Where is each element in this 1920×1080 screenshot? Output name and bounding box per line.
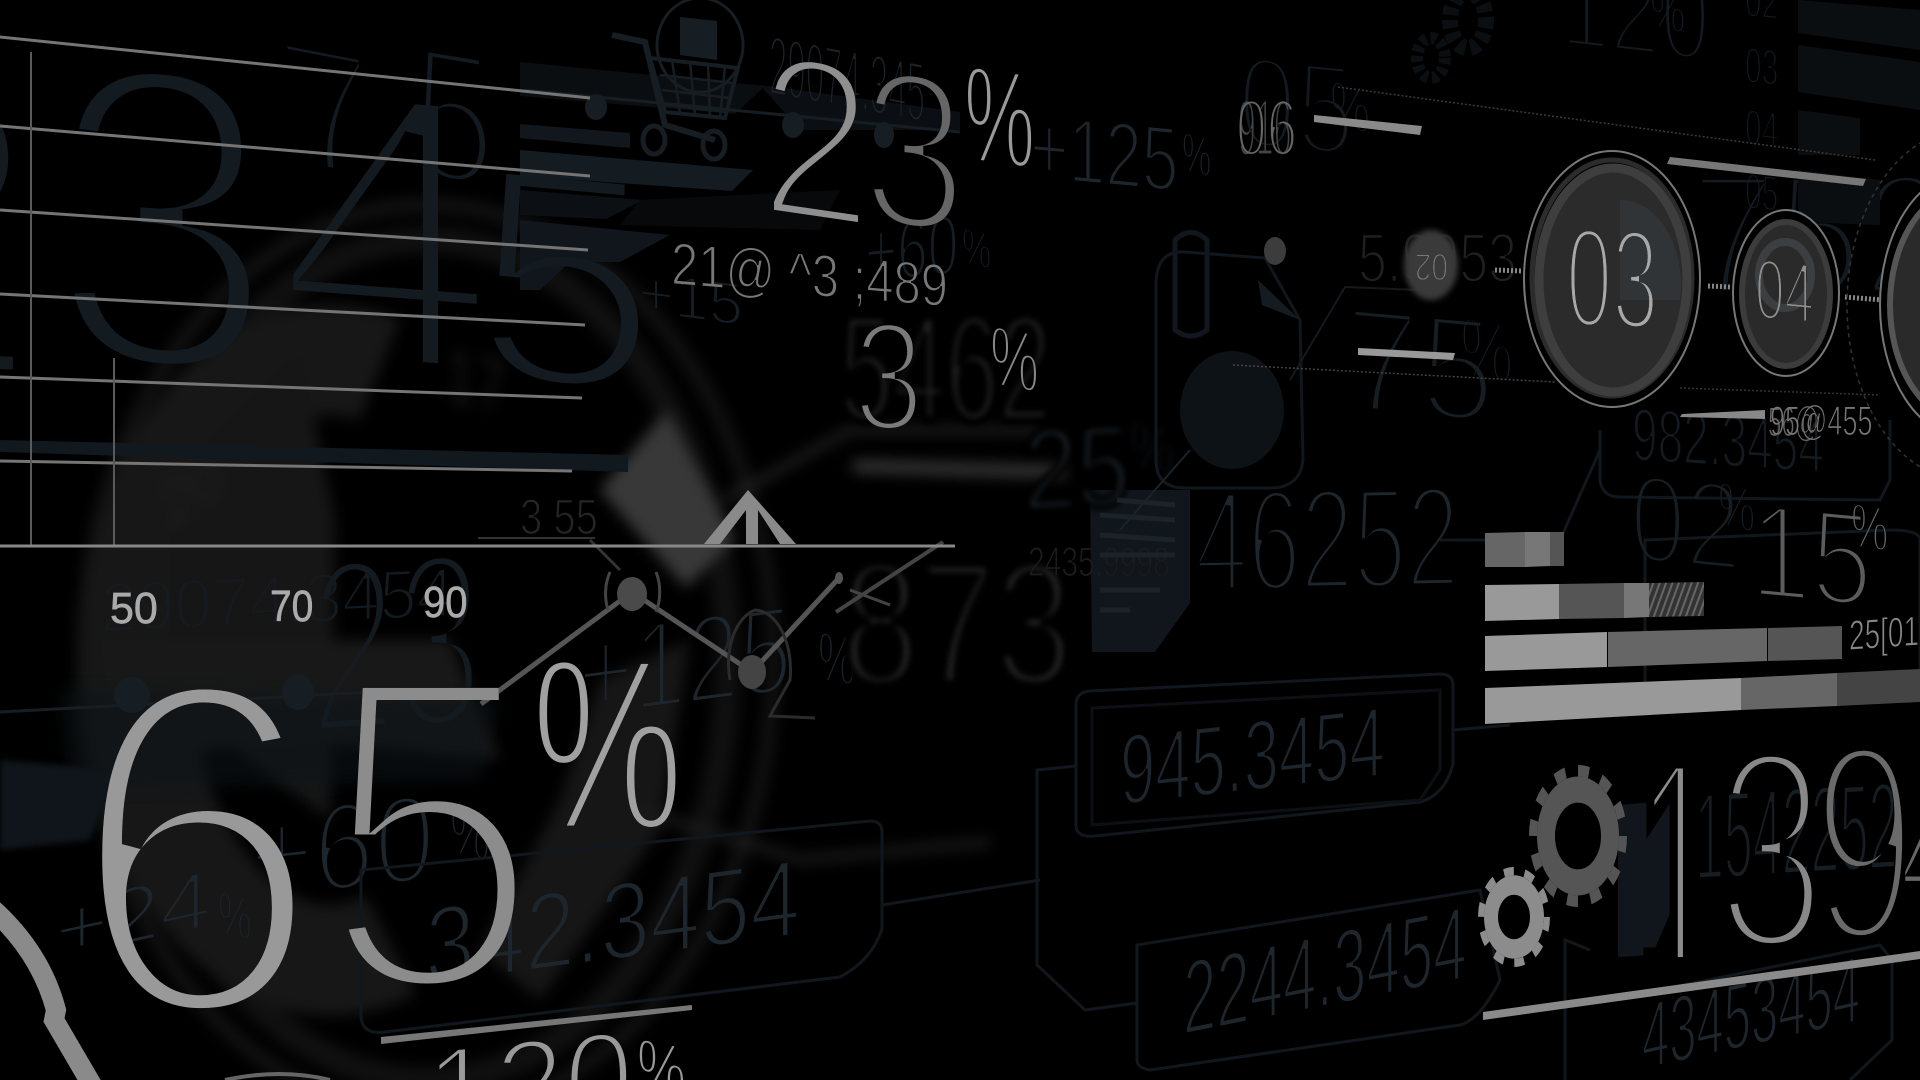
dim background numbers: +24 xyxy=(55,852,211,978)
blurred grey numbers xyxy=(840,284,1174,722)
icon: large gear xyxy=(1533,771,1623,901)
axis marker triangle xyxy=(704,490,796,544)
dim background numbers: +60 xyxy=(865,198,958,301)
box values: % xyxy=(1460,298,1513,402)
box values: 03 xyxy=(1745,37,1778,96)
figure: 95@455: 56@ xyxy=(1768,399,1819,446)
icon: shopping cart xyxy=(612,0,743,159)
dim background numbers: +60 xyxy=(250,767,435,927)
headline figure: 65%: % xyxy=(531,607,684,881)
blurred grey numbers: 25 xyxy=(1024,401,1130,535)
box values: 2244.3454 xyxy=(1183,884,1467,1058)
outlined cloud shape xyxy=(0,905,92,1080)
figure: 06: 916 xyxy=(1238,83,1291,172)
blurred dot and mirrored 02 badge: 02 xyxy=(1415,245,1448,287)
cropped circle badge 05 xyxy=(1847,130,1920,480)
box values: 04 xyxy=(1745,99,1778,158)
accent bars xyxy=(1233,87,1895,419)
dim background numbers: +125 xyxy=(578,578,792,745)
axis labels 50 70 90: 3 55 xyxy=(520,489,598,545)
figure: 3%: % xyxy=(990,308,1039,412)
timeline nodes xyxy=(0,90,960,713)
blurred donut chart background: 20 xyxy=(152,438,230,544)
dim background numbers: +15 xyxy=(638,258,743,338)
headline figure: 23% xyxy=(759,0,1035,283)
figure: 3%: 3 xyxy=(854,290,924,463)
box values: 5.9953 xyxy=(1358,220,1517,298)
figure: 3% xyxy=(854,290,1039,463)
long rule under 1394 xyxy=(1483,951,1920,1020)
horizontal chart lines xyxy=(0,37,955,546)
circle badge 04 xyxy=(1733,210,1839,376)
dim background numbers: 23 xyxy=(310,499,482,789)
dim background numbers xyxy=(55,18,1211,1009)
dim background numbers: % xyxy=(1182,121,1211,189)
box values: 2435.9998 xyxy=(1028,538,1170,585)
blurred grey numbers: 5462 xyxy=(840,284,1051,452)
icon: document, clip and pie xyxy=(1100,232,1420,610)
dim background numbers: % xyxy=(818,618,855,701)
figure: 06: 06 xyxy=(1236,83,1297,172)
circle badge 04: 04 xyxy=(1755,241,1814,343)
box values: % xyxy=(1718,469,1755,547)
big dim figures: 2345 xyxy=(0,0,659,472)
headline figure: 23%: 3 xyxy=(862,21,967,283)
figure: 15%: % xyxy=(1851,491,1888,565)
figure: 1394: 9 xyxy=(1813,685,1916,1000)
figure: 95@455: 95@455 xyxy=(1770,398,1872,445)
axis labels 50 70 90: 70 xyxy=(270,581,313,631)
box values: 75 xyxy=(1345,276,1495,456)
big dim figures: 2345: 5 xyxy=(412,4,495,230)
axis labels 50 70 90 xyxy=(110,489,598,633)
headline figure: 23%: % xyxy=(964,36,1035,198)
dim background numbers: 29074.345 xyxy=(769,18,925,141)
big dim figures: 2345: 4 xyxy=(275,0,497,462)
blurred donut chart background: 17 xyxy=(445,333,506,430)
box values: % xyxy=(1330,66,1370,148)
figure: 1394: 1 xyxy=(1636,691,1719,1048)
dim background numbers: % xyxy=(962,218,991,281)
blurred grey numbers: 873 xyxy=(842,526,1072,722)
box values: 05 xyxy=(1745,163,1778,222)
box values: 02 xyxy=(1630,448,1741,599)
box values: 46252 xyxy=(1195,455,1459,623)
circle badge 03: 03 xyxy=(1566,198,1658,360)
axis labels 50 70 90: 50 xyxy=(110,585,158,633)
axis labels 50 70 90: 90 xyxy=(423,577,467,626)
box values: 05 xyxy=(1238,29,1355,185)
headline figure: 23%: 2 xyxy=(759,0,873,280)
rule and cropped figure: 120% xyxy=(381,1003,692,1080)
headline figure: 65% xyxy=(69,579,684,1080)
stacked bar chart xyxy=(1485,532,1920,724)
box values: 982.3454 xyxy=(1632,394,1824,489)
donut segment blocks and line chart xyxy=(481,540,943,718)
icon: dim gears xyxy=(1417,0,1486,78)
blurred dot and mirrored 02 badge xyxy=(1264,230,1458,300)
icon: small gear xyxy=(1481,871,1547,963)
circle badge 03 xyxy=(1524,151,1700,407)
dark blue bar panel behind the percent figure xyxy=(0,62,1676,957)
box values: 1542252 xyxy=(1695,756,1897,907)
blurred donut chart background xyxy=(83,205,1065,1080)
big dim figures: 2345: 7 xyxy=(266,0,397,224)
box values: 945.3454 xyxy=(1120,685,1385,826)
dim background numbers: 29074.3454 xyxy=(100,553,454,647)
blurred grey numbers: % xyxy=(1130,405,1174,490)
big dim figures: 2345: 5 xyxy=(472,98,659,461)
dim background numbers: 342.3454 xyxy=(425,837,800,1009)
dim background numbers: % xyxy=(450,788,490,876)
dim background numbers: % xyxy=(218,878,252,954)
figure: 1394 xyxy=(1644,750,1920,957)
dark side panels xyxy=(1798,0,1920,225)
dim background numbers: +125 xyxy=(1030,94,1179,211)
figure: 1394: 3 xyxy=(1717,690,1825,1009)
text line 21@ ^3 ;489: 21@ ^3 ;489 xyxy=(671,229,948,320)
headline figure: 65%: 5 xyxy=(321,579,541,1080)
outlined value boxes with numbers xyxy=(361,252,1920,1080)
figure: 15%: 15 xyxy=(1750,475,1872,637)
dim arc near cloud xyxy=(225,1074,330,1080)
box values xyxy=(1028,0,1920,1080)
